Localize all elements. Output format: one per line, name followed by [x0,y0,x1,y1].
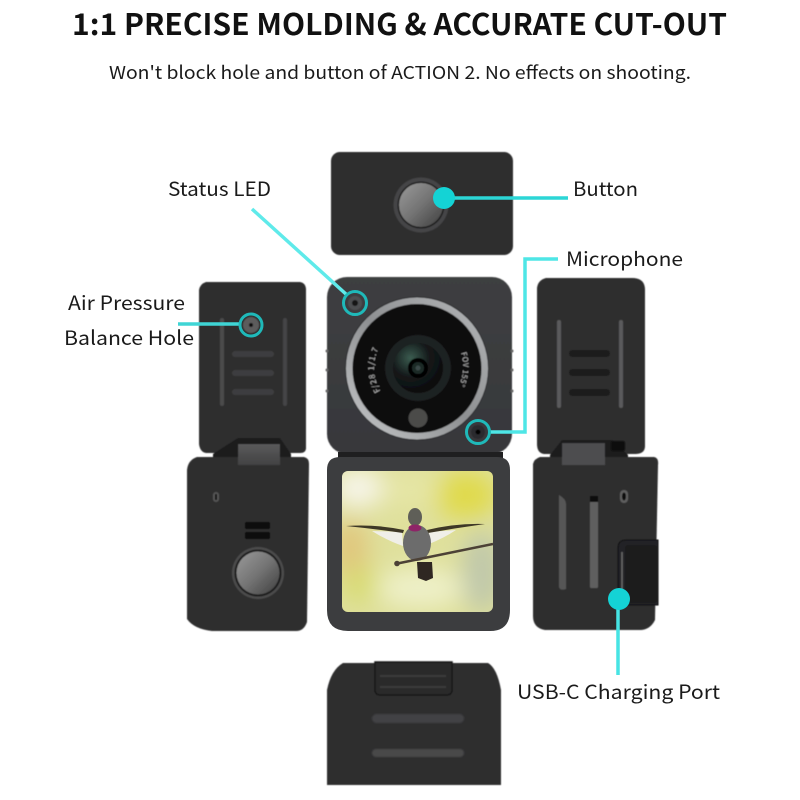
callout: USB-C Charging Port [517,588,721,705]
callout: Status LED: Status LED [168,173,271,202]
panel: camera screen frame with hummingbird photo [327,452,510,631]
panel: right side lower cover [533,441,658,630]
callout: Button: Button [573,173,638,202]
panel: bottom cover [327,662,501,785]
panel: left side upper cover [199,282,306,460]
panel: top cover with button [331,152,513,255]
twig [395,544,493,564]
subtitle: Won't block hole and button of ACTION 2. No effects on shooting. [109,59,691,85]
hummingbird [346,508,485,581]
title: 1:1 PRECISE MOLDING & ACCURATE CUT-OUT [72,2,727,44]
panel: left side lower cover [187,444,309,631]
lens marking: field of view: FOV 155° [460,351,470,388]
panel: camera body with lens [324,276,514,453]
lens marking: aperture: F/28 1/1.7 [367,346,381,394]
callout: Status LED [168,173,366,314]
callout: Air Pressure Balance Hole: Balance Hole [64,322,194,351]
callout: Microphone [466,243,683,444]
panel: right side upper cover [537,278,645,460]
callout: Microphone: Microphone [566,243,683,272]
callout: Air Pressure Balance Hole: Air Pressure [68,287,185,316]
callout: USB-C Charging Port: USB-C Charging Port [517,676,721,705]
callout: Air Pressure Balance Hole [64,287,262,351]
callout: Button [433,173,638,209]
